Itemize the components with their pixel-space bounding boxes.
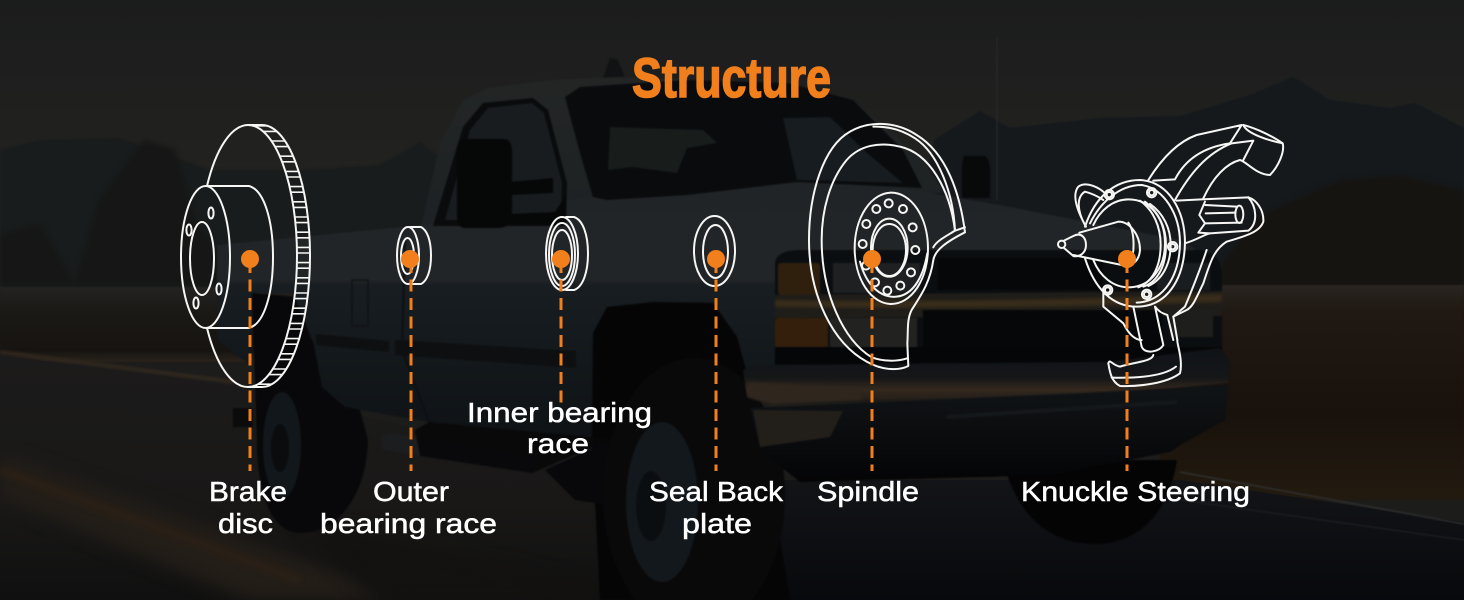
icon: steering knuckle [1058, 125, 1283, 386]
marker dot [707, 250, 725, 268]
upper amber lamp [778, 263, 820, 295]
part: spindle [809, 124, 965, 507]
upper clear lamp [833, 263, 920, 293]
marker dot [241, 250, 259, 268]
label: bearing race [320, 508, 497, 539]
marker dot [1118, 250, 1136, 268]
icon: outer bearing race [397, 227, 431, 284]
antenna [996, 37, 998, 200]
chrome bar [775, 291, 1222, 318]
rear bumper stub [233, 408, 253, 427]
label: plate [682, 508, 752, 539]
leader line [1126, 261, 1128, 471]
windshield [565, 80, 922, 200]
lower grille [923, 310, 1163, 347]
mountains [900, 77, 1464, 300]
treeline [0, 140, 240, 285]
label: Inner bearing [467, 397, 652, 428]
leader line [560, 261, 562, 408]
leader line [248, 261, 252, 471]
upper grille [937, 258, 1103, 290]
marker dot [552, 250, 570, 268]
part: outer bearing race [320, 227, 497, 539]
marker dot [401, 250, 419, 268]
title: Structure [632, 46, 831, 109]
side window [433, 98, 567, 226]
lower amber lamp [775, 318, 828, 348]
icon: seal back plate [694, 216, 735, 286]
body trim [316, 334, 576, 368]
label: Knuckle Steering [1021, 476, 1250, 507]
background: pickup truck [217, 37, 1230, 600]
label: Brake [209, 476, 287, 507]
front wheel [603, 358, 785, 600]
part: brake disc [181, 125, 310, 539]
far wheel [1003, 460, 1177, 544]
part: inner bearing race [467, 217, 652, 459]
lower clear lamp [830, 318, 917, 347]
label: Outer [373, 476, 449, 507]
label: Seal Back [649, 476, 784, 507]
cab [420, 77, 945, 240]
mirror [457, 139, 512, 228]
truck body [217, 182, 1222, 437]
label: race [527, 428, 589, 459]
grille surround [775, 250, 1222, 350]
step bar [381, 433, 536, 473]
roof marker [603, 58, 625, 78]
marker dot [863, 250, 881, 268]
leader line [870, 261, 874, 471]
label: disc [218, 508, 273, 539]
rear wheel [252, 293, 368, 533]
leader line [714, 261, 718, 471]
road [0, 355, 1464, 600]
front wheel arch [592, 302, 790, 600]
icon: spindle [809, 124, 965, 369]
bumper [743, 348, 1230, 405]
fields [0, 287, 340, 362]
label: Spindle [817, 476, 919, 507]
far mirror [962, 156, 990, 198]
part: seal back plate [649, 216, 784, 539]
icon: inner bearing race [546, 217, 588, 290]
part: knuckle steering [1021, 125, 1283, 507]
dark band under grille [775, 347, 1222, 367]
icon: brake disc [181, 125, 310, 387]
leader line [410, 261, 412, 471]
lower valance [750, 385, 1228, 482]
